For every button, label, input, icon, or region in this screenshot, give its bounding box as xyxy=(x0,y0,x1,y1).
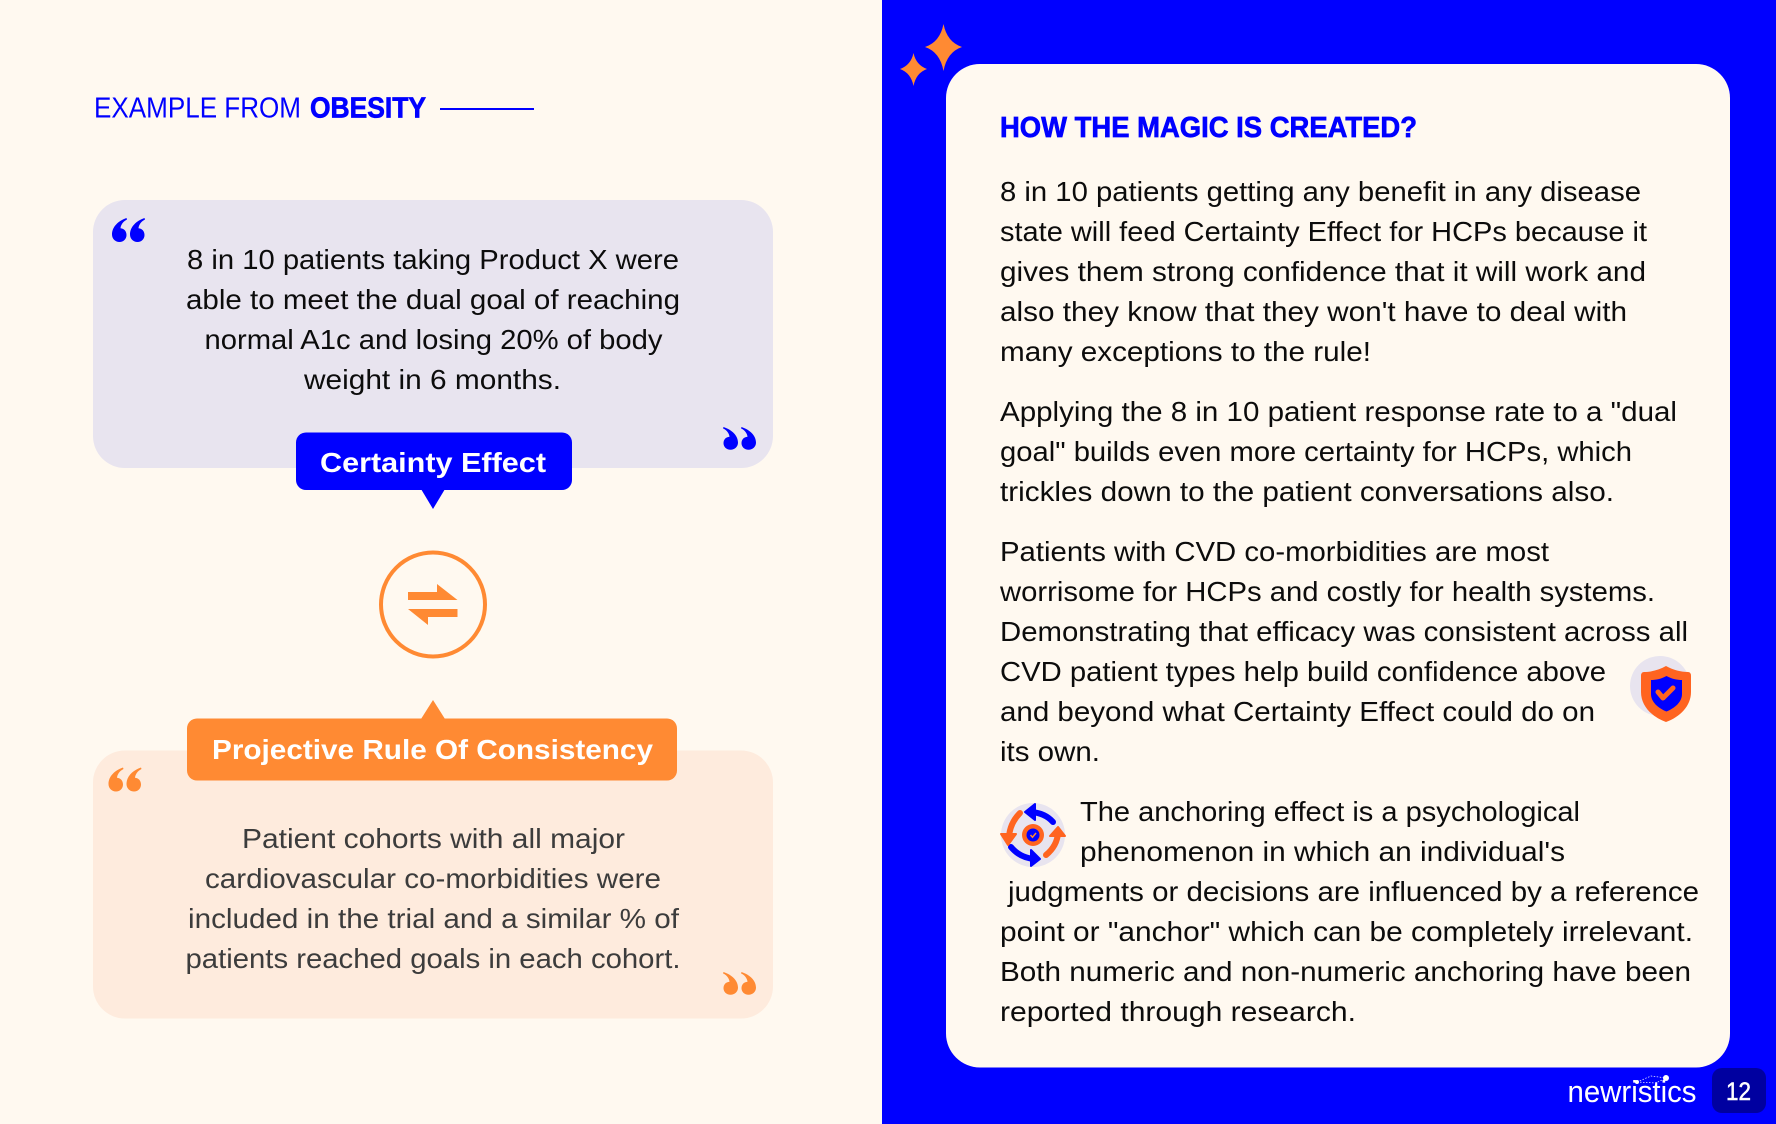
text: projective rule example: cardiovascular co-morbidities were xyxy=(205,863,661,894)
label: certainty effect: Certainty Effect xyxy=(320,447,546,478)
text: projective rule example: patients reached goals in each cohort. xyxy=(186,943,680,974)
text: paragraph on CVD co-morbidities: Demonstrating that efficacy was consistent across all xyxy=(1000,616,1688,647)
text: paragraph on dual goal xyxy=(1000,396,1677,507)
heading: how the magic is created: HOW THE MAGIC IS CREATED? xyxy=(1000,112,1417,144)
text: projective rule example: included in the trial and a similar % of xyxy=(188,903,679,934)
text: paragraph on anchoring effect: reported through research. xyxy=(1000,996,1356,1027)
icon: closing quote mark xyxy=(723,972,756,995)
text: paragraph on anchoring effect: point or "anchor" which can be completely irrelevant. xyxy=(1000,916,1693,947)
text: certainty effect example: normal A1c and losing 20% of body xyxy=(204,324,662,355)
text: paragraph on CVD co-morbidities: its own. xyxy=(1000,736,1100,767)
icon: orange sparkles xyxy=(900,24,962,86)
text: paragraph on anchoring effect: phenomenon in which an individual's xyxy=(1080,836,1565,867)
icon: exchange arrows in circle xyxy=(381,552,485,656)
text: paragraph on dual goal: goal" builds even more certainty for HCPs, which xyxy=(1000,436,1632,467)
text: paragraph on anchoring effect: Both numeric and non-numeric anchoring have been xyxy=(1000,956,1691,987)
text: paragraph on anchoring effect: The anchoring effect is a psychological xyxy=(1080,796,1580,827)
text: certainty effect example: able to meet the dual goal of reaching xyxy=(186,284,680,315)
icon: closing quote mark xyxy=(723,427,756,450)
panel: how the magic is created card xyxy=(946,64,1730,1068)
text: paragraph on anchoring effect: judgments or decisions are influenced by a reference xyxy=(1007,876,1699,907)
text: paragraph on certainty effect: also they know that they won't have to deal with xyxy=(1000,296,1627,327)
icon: circular anchoring arrows xyxy=(1001,803,1065,867)
label: projective rule of consistency xyxy=(187,700,677,780)
section heading: example from obesity: EXAMPLE FROM xyxy=(94,92,301,124)
text: certainty effect example: weight in 6 months. xyxy=(303,364,561,395)
text: certainty effect example xyxy=(186,244,680,395)
text: projective rule example xyxy=(186,823,680,974)
text: paragraph on dual goal: trickles down to the patient conversations also. xyxy=(1000,476,1614,507)
text: paragraph on certainty effect: state will feed Certainty Effect for HCPs because it xyxy=(1000,216,1647,247)
panel: blue background xyxy=(882,0,1776,1124)
text: paragraph on certainty effect: many exceptions to the rule! xyxy=(1000,336,1371,367)
page number badge xyxy=(1712,1068,1766,1113)
text: certainty effect example: 8 in 10 patients taking Product X were xyxy=(187,244,679,275)
text: paragraph on CVD co-morbidities: worrisome for HCPs and costly for health systems. xyxy=(999,576,1655,607)
text: paragraph on certainty effect xyxy=(1000,176,1647,367)
text: paragraph on certainty effect: gives them strong confidence that it will work and xyxy=(1000,256,1646,287)
text: paragraph on CVD co-morbidities: Patients with CVD co-morbidities are most xyxy=(1000,536,1549,567)
text: paragraph on CVD co-morbidities xyxy=(999,536,1688,767)
section heading: example from obesity xyxy=(94,92,534,124)
icon: shield with check xyxy=(1630,656,1691,722)
panel: certainty effect quote xyxy=(93,200,773,468)
text: paragraph on dual goal: Applying the 8 in 10 patient response rate to a "dual xyxy=(1000,396,1677,427)
label: projective rule of consistency: Projective Rule Of Consistency xyxy=(212,734,653,765)
icon: opening quote mark xyxy=(112,218,145,242)
text: paragraph on anchoring effect xyxy=(1000,796,1699,1027)
panel: projective rule of consistency quote xyxy=(93,750,773,1018)
text: projective rule example: Patient cohorts with all major xyxy=(242,823,625,854)
icon: opening quote mark xyxy=(108,768,142,792)
text: paragraph on CVD co-morbidities: and beyond what Certainty Effect could do on xyxy=(1000,696,1595,727)
text: paragraph on certainty effect: 8 in 10 patients getting any benefit in any disease xyxy=(1000,176,1641,207)
logo: newristics: newristics xyxy=(1568,1074,1696,1109)
page number badge: 12 xyxy=(1726,1078,1751,1106)
text: paragraph on CVD co-morbidities: CVD patient types help build confidence above xyxy=(1000,656,1606,687)
section heading: example from obesity: OBESITY xyxy=(310,92,426,124)
label: certainty effect xyxy=(296,432,572,509)
